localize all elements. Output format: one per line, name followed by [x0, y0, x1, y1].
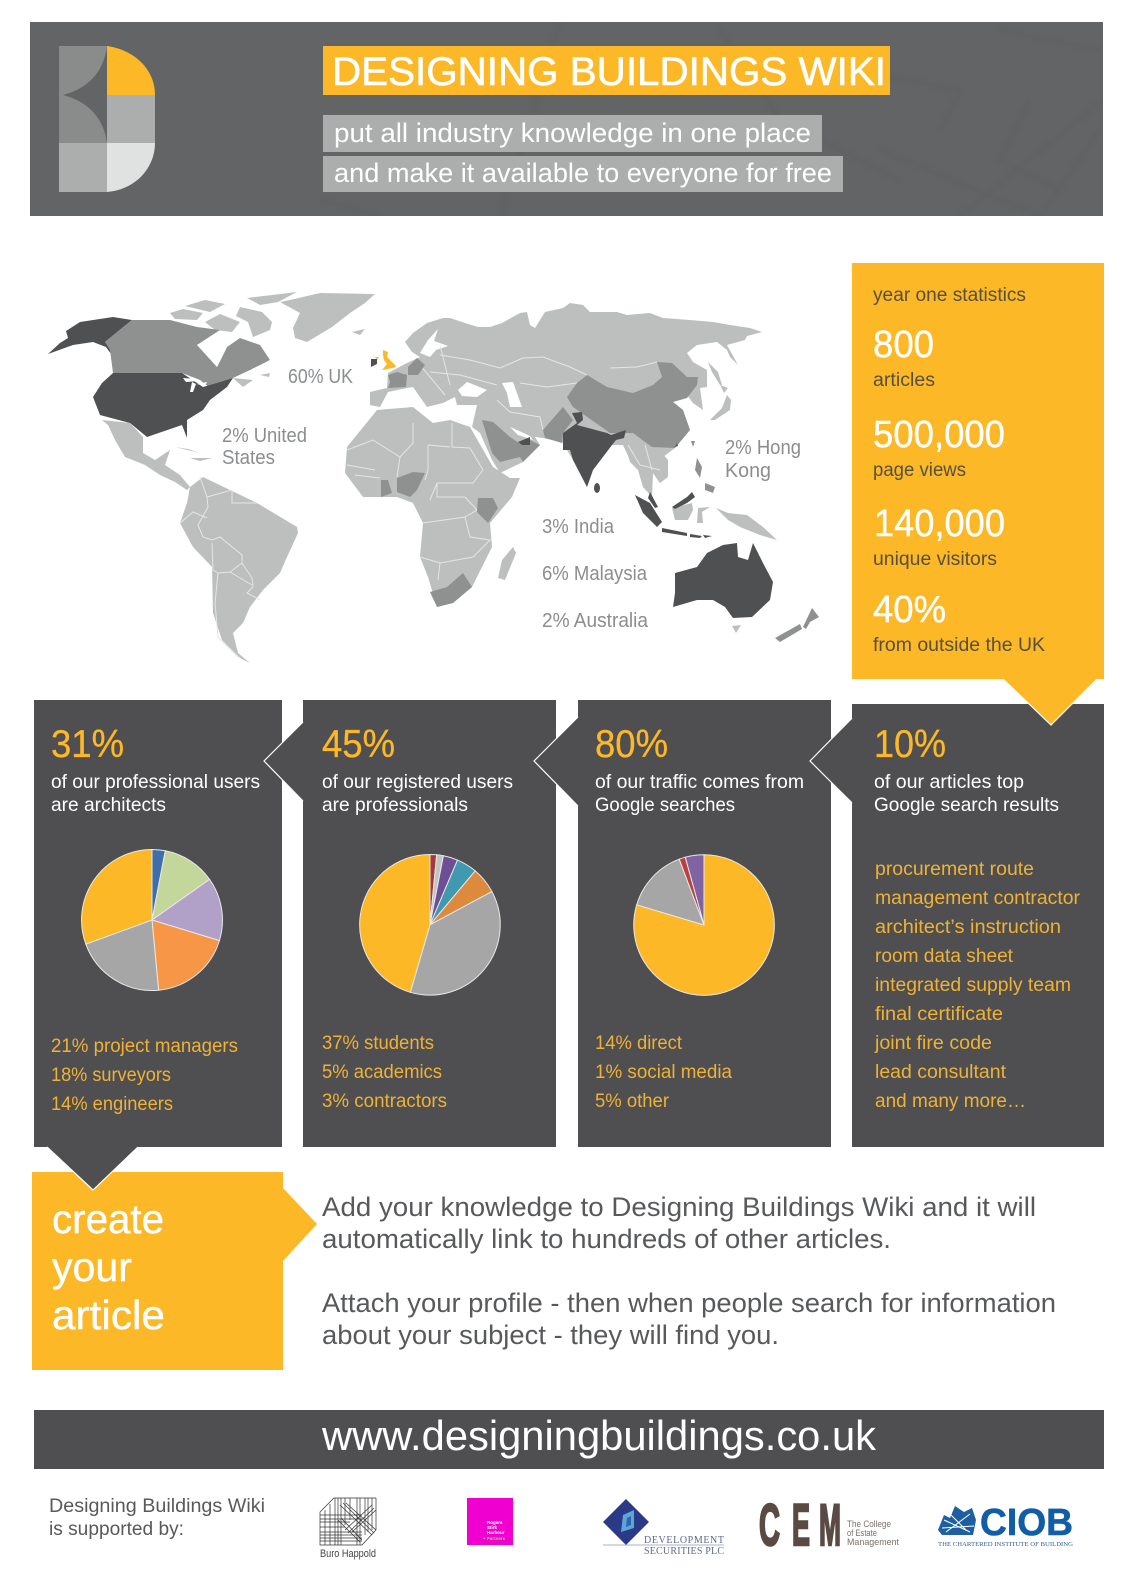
panel: google traffic: Google searches [595, 794, 735, 816]
logo: College of Estate Management: M [819, 1493, 841, 1558]
logo: Development Securities: DEVELOPMENT [644, 1535, 724, 1546]
website banner: www.designingbuildings.co.uk [321, 1412, 877, 1459]
logo: Rogers Stirk Harbour + Partners: + Partners [483, 1536, 506, 1541]
logo: College of Estate Management: The College [847, 1519, 891, 1530]
panel: google traffic: of our traffic comes from [595, 771, 804, 793]
panel: year one statistics: page views [873, 460, 966, 481]
search terms list: joint fire code [874, 1033, 992, 1054]
search terms list: room data sheet [875, 946, 1014, 967]
map label: UK: 60% UK [288, 366, 354, 388]
panel: professional users: 21% project managers [51, 1036, 238, 1057]
panel: create your article: create [52, 1196, 164, 1242]
panel: professional users: 31% [51, 723, 124, 766]
panel: professional users [34, 700, 282, 1190]
subtitle line one: put all industry knowledge in one place [334, 118, 811, 148]
map label: Hong Kong: 2% Hong [725, 437, 801, 459]
logo: Buro Happold [320, 1498, 376, 1560]
panel: create your article [32, 1172, 317, 1370]
map label: Australia: 2% Australia [542, 610, 649, 632]
search terms list: procurement route [875, 859, 1034, 880]
africa [345, 407, 520, 607]
panel: create your article: article [52, 1292, 165, 1338]
panel: google traffic: 14% direct [595, 1033, 683, 1054]
panel: registered users: are professionals [322, 794, 468, 816]
panel: articles top google [852, 704, 1104, 1147]
subtitle line two: and make it available to everyone for free [334, 158, 832, 188]
logo: Development Securities: SECURITIES PLC [644, 1546, 724, 1557]
panel: google traffic: 80% [595, 723, 668, 766]
body text: Add your knowledge to Designing Buildings Wiki and it will [322, 1192, 1036, 1222]
panel: google traffic: 1% social media [595, 1062, 732, 1083]
map label: United States: States [222, 447, 275, 469]
north america [48, 292, 375, 490]
panel: professional users: 14% engineers [51, 1094, 173, 1115]
logo: Rogers Stirk Harbour + Partners: Rogers [487, 1520, 503, 1525]
panel: articles top google: 10% [874, 723, 946, 766]
world map [48, 292, 819, 663]
panel: registered users: of our registered users [322, 771, 513, 793]
search terms list: architect’s instruction [875, 917, 1061, 938]
website banner [34, 1410, 1104, 1469]
logo: College of Estate Management [759, 1493, 899, 1558]
arrow: panel four pointing left [810, 718, 853, 803]
logo: College of Estate Management: E [792, 1493, 810, 1558]
pie chart: registered users [360, 854, 500, 995]
map label: Hong Kong [725, 437, 801, 482]
header banner [30, 22, 1103, 216]
panel: registered users [264, 700, 556, 1147]
map label: United States: 2% United [222, 425, 307, 447]
panel: year one statistics: articles [873, 370, 935, 391]
map label: Malaysia: 6% Malaysia [542, 563, 648, 585]
body text: about your subject - they will find you. [322, 1320, 779, 1350]
panel: year one statistics: 40% [873, 589, 946, 631]
map label: United States [222, 425, 307, 469]
body text: Attach your profile - then when people search for information [322, 1288, 1056, 1318]
logo: Rogers Stirk Harbour + Partners: Harbour [487, 1530, 505, 1535]
search terms list: lead consultant [875, 1062, 1007, 1083]
panel: registered users: 37% students [322, 1033, 434, 1054]
panel: year one statistics: 800 [873, 324, 934, 366]
search terms list: final certificate [875, 1004, 1003, 1025]
supporters text: Designing Buildings Wiki [49, 1496, 265, 1517]
logo: CIOB [938, 1502, 1073, 1548]
panel: articles top google: Google search results [874, 794, 1059, 816]
panel: create your article: your [52, 1244, 132, 1290]
logo: Rogers Stirk Harbour + Partners: Stirk [487, 1525, 498, 1530]
logo: Buro Happold: Buro Happold [320, 1548, 376, 1560]
panel: year one statistics: 140,000 [874, 503, 1005, 545]
body text: automatically link to hundreds of other articles. [322, 1224, 891, 1254]
logo: CIOB: THE CHARTERED INSTITUTE OF BUILDING [938, 1541, 1073, 1548]
search terms list [874, 859, 1081, 1112]
logo: College of Estate Management: C [759, 1493, 780, 1558]
panel: professional users: of our professional users [51, 771, 260, 793]
panel: google traffic [534, 700, 831, 1147]
logo: Rogers Stirk Harbour + Partners [467, 1498, 513, 1545]
panel: registered users: 45% [322, 723, 395, 766]
pie chart: professional users [82, 850, 222, 991]
logo: College of Estate Management: Management [847, 1537, 899, 1548]
title: DESIGNING BUILDINGS WIKI [332, 50, 886, 94]
eurasia [370, 303, 762, 497]
map label: Hong Kong: Kong [725, 460, 771, 482]
logo: Development Securities [603, 1499, 724, 1557]
supporters text [49, 1496, 265, 1540]
logo: CIOB: CIOB [980, 1502, 1073, 1544]
panel: registered users: 5% academics [322, 1062, 442, 1083]
panel: year one statistics: year one statistics [873, 285, 1026, 306]
panel: year one statistics: 500,000 [873, 414, 1005, 456]
supporters text: is supported by: [49, 1519, 184, 1540]
logo: College of Estate Management: of Estate [847, 1528, 877, 1539]
panel: professional users: are architects [51, 794, 166, 816]
panel: year one statistics: unique visitors [873, 549, 997, 570]
panel: year one statistics: from outside the UK [873, 635, 1045, 656]
search terms list: management contractor [875, 888, 1081, 909]
south east asia and oceania [635, 441, 819, 642]
south america [180, 477, 298, 663]
search terms list: integrated supply team [875, 975, 1071, 996]
panel: year one statistics [852, 263, 1104, 725]
map label: India: 3% India [542, 516, 615, 538]
panel: articles top google: of our articles top [874, 771, 1024, 793]
panel: professional users: 18% surveyors [51, 1065, 171, 1086]
panel: registered users: 3% contractors [322, 1091, 447, 1112]
body text [322, 1192, 1056, 1350]
pie chart: google traffic [634, 855, 774, 995]
search terms list: and many more… [875, 1091, 1026, 1112]
panel: google traffic: 5% other [595, 1091, 670, 1112]
logo [59, 46, 155, 192]
